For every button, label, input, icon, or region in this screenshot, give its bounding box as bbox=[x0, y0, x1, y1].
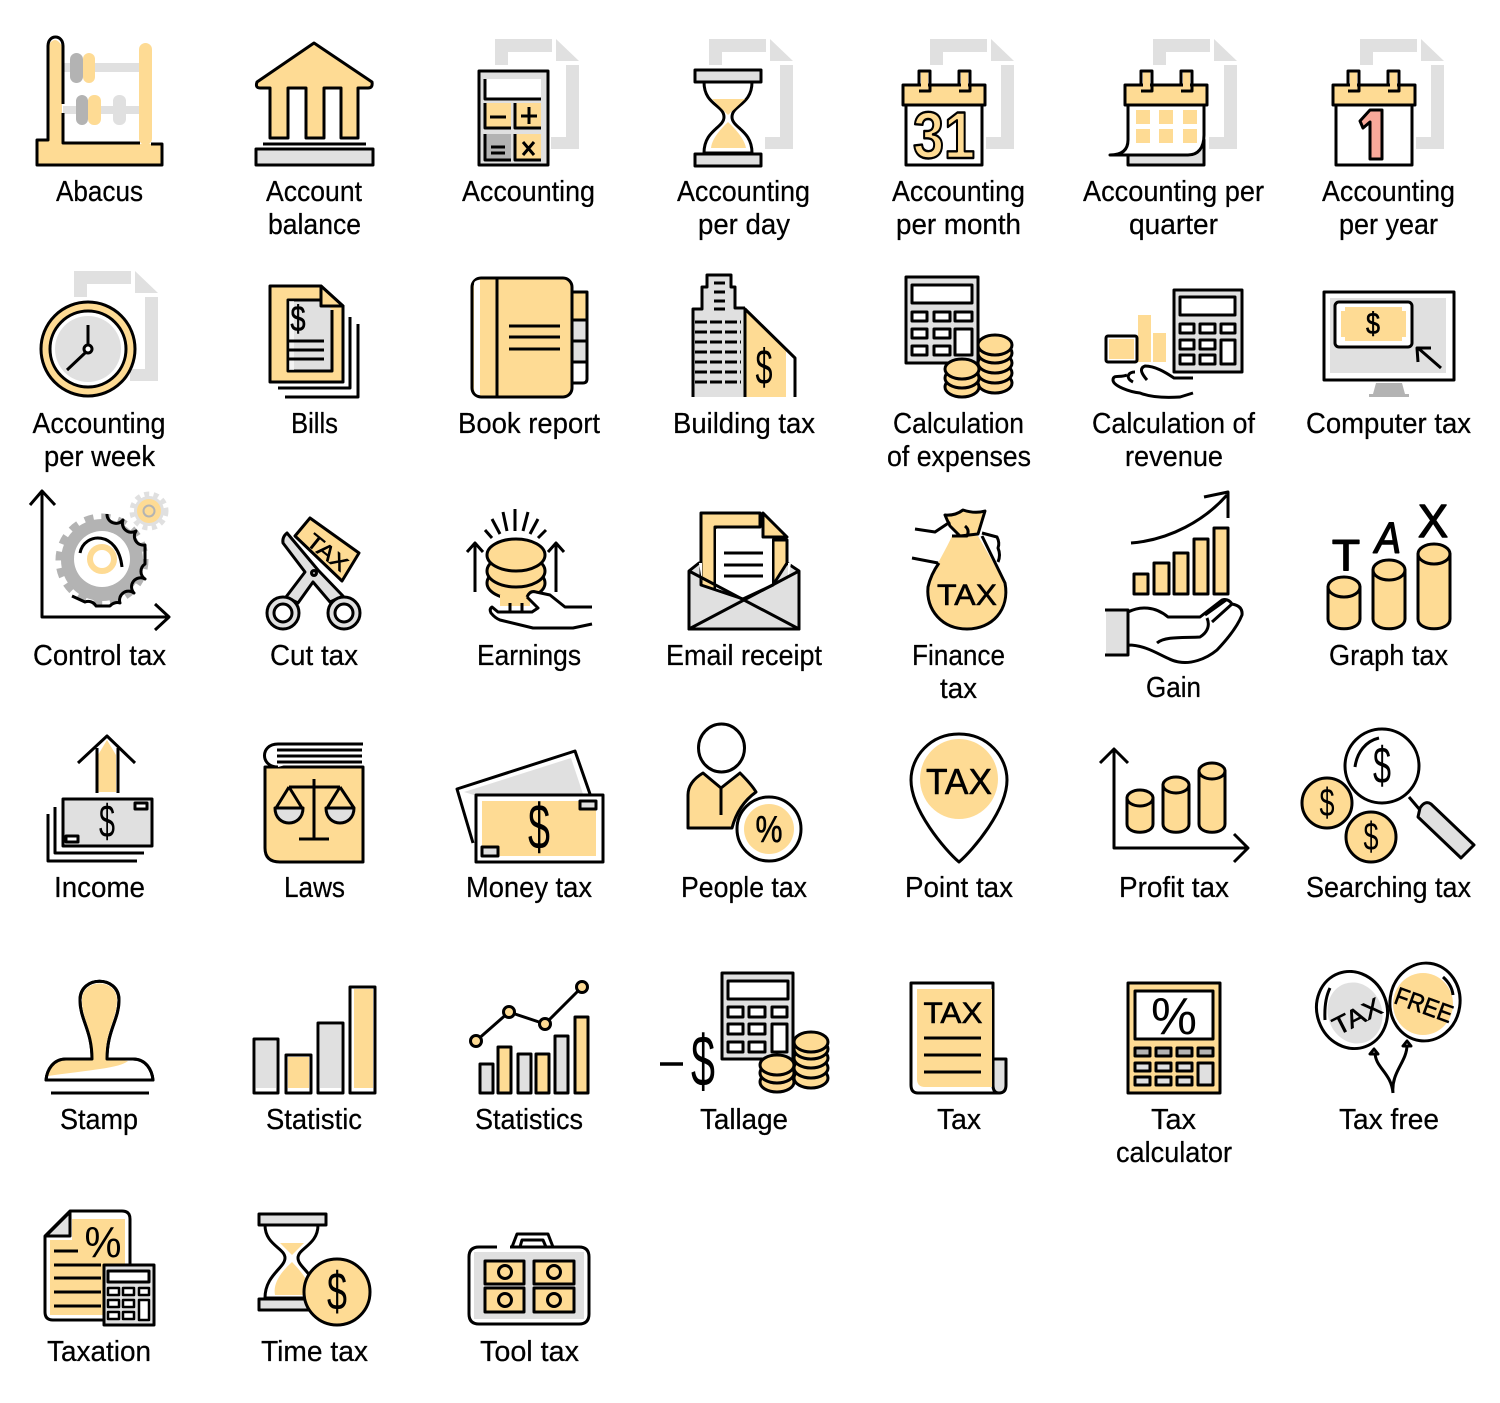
item: Laws bbox=[264, 744, 363, 904]
icon: money bag bbox=[912, 510, 1006, 629]
item: Earnings bbox=[467, 509, 592, 672]
icon: chart with cylinders bbox=[1100, 749, 1248, 862]
label: Accounting per month: per month bbox=[896, 209, 1021, 241]
icon: person with percent badge bbox=[688, 724, 801, 861]
label: Money tax: Money tax bbox=[466, 872, 592, 904]
icon text: dollar sign: $ bbox=[327, 1262, 347, 1322]
label: Finance tax: Finance bbox=[912, 640, 1005, 672]
item: Money tax bbox=[457, 751, 603, 904]
item: Accounting bbox=[462, 39, 595, 208]
label: Account balance: Account bbox=[266, 176, 362, 208]
label: Calculation of revenue: Calculation of bbox=[1092, 408, 1256, 440]
icon: percent calculator bbox=[1128, 983, 1220, 1093]
item: Accounting per day bbox=[677, 39, 810, 241]
label: Gain: Gain bbox=[1146, 672, 1201, 704]
icon text: percent: % bbox=[1151, 988, 1197, 1046]
label: Accounting per month bbox=[892, 176, 1025, 241]
icon: calendar 31 bbox=[903, 39, 1014, 172]
icon: calendar 31: 31 bbox=[913, 98, 975, 172]
item: Time tax bbox=[259, 1214, 370, 1368]
icon text: T A X: T bbox=[1332, 531, 1360, 580]
label: Finance tax bbox=[912, 640, 1005, 705]
label: Account balance: balance bbox=[268, 209, 361, 241]
item: Email receipt bbox=[666, 513, 822, 672]
icon text: TAX: TAX bbox=[937, 579, 997, 612]
icon: money with up arrow bbox=[48, 736, 152, 861]
label: Profit tax: Profit tax bbox=[1119, 872, 1229, 904]
label: Calculation of expenses: of expenses bbox=[887, 441, 1031, 473]
label: Tax calculator: Tax bbox=[1151, 1104, 1196, 1136]
icon: bar chart bbox=[254, 987, 375, 1093]
label: Time tax: Time tax bbox=[261, 1336, 368, 1368]
label: Tax: Tax bbox=[937, 1104, 981, 1136]
icon text: magnifier dollar: $ bbox=[1373, 737, 1391, 795]
label: Accounting: Accounting bbox=[462, 176, 595, 208]
icon text: T A X bbox=[1332, 495, 1448, 580]
label: Calculation of expenses bbox=[887, 408, 1031, 473]
item: Accounting per week bbox=[32, 271, 166, 473]
icon: bars with line chart bbox=[470, 982, 588, 1093]
label: Computer tax: Computer tax bbox=[1306, 408, 1471, 440]
label: Accounting per day: Accounting bbox=[677, 176, 810, 208]
icon: cylinders with TAX letters bbox=[1328, 495, 1450, 629]
icon: envelope with document bbox=[689, 513, 799, 629]
icon text: dollar sign: $ bbox=[1366, 306, 1380, 341]
icon: coins and hand bbox=[467, 509, 592, 628]
icon text: second coin dollar: $ bbox=[1364, 815, 1378, 859]
label: Calculation of expenses: Calculation bbox=[893, 408, 1024, 440]
icon: bills bbox=[270, 286, 358, 397]
label: Taxation: Taxation bbox=[47, 1336, 151, 1368]
icon: hand with growth chart bbox=[1105, 492, 1242, 662]
icon text: FREE: FREE bbox=[1391, 982, 1457, 1029]
icon text: T A X: X bbox=[1418, 495, 1448, 547]
label: Statistic: Statistic bbox=[266, 1104, 362, 1136]
icon: book bbox=[472, 278, 587, 397]
item: Point tax bbox=[905, 734, 1013, 904]
item: Control tax bbox=[30, 491, 169, 672]
item: Tax calculator bbox=[1116, 983, 1232, 1169]
icon text: dollar sign: $ bbox=[99, 795, 115, 847]
item: Statistics bbox=[470, 982, 588, 1136]
icon: chart with gears bbox=[30, 491, 169, 630]
icon text: TAX: TAX bbox=[1328, 992, 1387, 1041]
icon text: TAX: TAX bbox=[926, 761, 992, 802]
label: Accounting per day bbox=[677, 176, 810, 241]
item: Calculation of revenue bbox=[1092, 290, 1256, 473]
icon: rubber stamp bbox=[46, 981, 153, 1093]
item: Taxation bbox=[45, 1211, 154, 1368]
label: Finance tax: tax bbox=[940, 673, 977, 705]
icon: tool case bbox=[468, 1234, 590, 1325]
label: Accounting per day: per day bbox=[698, 209, 790, 241]
label: Accounting per month: Accounting bbox=[892, 176, 1025, 208]
item: Tool tax bbox=[468, 1234, 590, 1368]
item: Building tax bbox=[673, 275, 815, 440]
label: People tax: People tax bbox=[681, 872, 807, 904]
icon: hourglass bbox=[695, 39, 793, 166]
item: Abacus bbox=[37, 37, 162, 208]
icon: scissors cutting tag bbox=[267, 518, 360, 629]
label: Calculation of revenue: revenue bbox=[1125, 441, 1223, 473]
label: Accounting per quarter bbox=[1083, 176, 1264, 241]
icon: accounting calculator bbox=[479, 39, 579, 165]
item: Gain bbox=[1105, 492, 1242, 704]
label: Book report: Book report bbox=[458, 408, 600, 440]
icon: hourglass and coin bbox=[259, 1214, 370, 1325]
item: Stamp bbox=[46, 981, 153, 1136]
icon text: TAX tag: TAX bbox=[302, 530, 352, 576]
item: Computer tax bbox=[1306, 292, 1471, 440]
icon text: percent: % bbox=[84, 1218, 122, 1267]
item: Cut tax bbox=[267, 518, 360, 672]
item: Profit tax bbox=[1100, 749, 1248, 904]
icon: calendar page curl bbox=[1110, 39, 1237, 165]
item: Book report bbox=[458, 278, 600, 440]
icon: tax document bbox=[911, 983, 1006, 1093]
label: Bills: Bills bbox=[291, 408, 338, 440]
label: Earnings: Earnings bbox=[477, 640, 581, 672]
icon: map pin bbox=[911, 734, 1007, 862]
icon: balloons bbox=[1306, 959, 1465, 1093]
icon text: dollar sign: $ bbox=[290, 298, 306, 339]
label: Accounting per week: Accounting bbox=[32, 408, 166, 440]
label: Cut tax: Cut tax bbox=[270, 640, 358, 672]
label: Accounting per year: Accounting bbox=[1322, 176, 1455, 208]
item: Finance tax bbox=[912, 510, 1006, 705]
icon: building and document bbox=[693, 275, 795, 397]
label: Laws: Laws bbox=[284, 872, 345, 904]
icon: clock bbox=[41, 271, 158, 396]
icon: account balance bbox=[256, 43, 373, 165]
item: People tax bbox=[681, 724, 807, 904]
label: Tax calculator: calculator bbox=[1116, 1137, 1232, 1169]
label: Statistics: Statistics bbox=[475, 1104, 583, 1136]
label: Building tax: Building tax bbox=[673, 408, 815, 440]
label: Control tax: Control tax bbox=[33, 640, 166, 672]
icon: calendar 1 bbox=[1333, 39, 1444, 165]
icon: law book with scales bbox=[264, 744, 363, 862]
item: Accounting per year bbox=[1322, 39, 1455, 241]
label: Searching tax: Searching tax bbox=[1306, 872, 1471, 904]
item: Accounting per month bbox=[892, 39, 1025, 241]
label: Account balance bbox=[266, 176, 362, 241]
icon text: dollar sign: $ bbox=[691, 1022, 715, 1102]
icon text: coin dollar: $ bbox=[1320, 781, 1334, 825]
label: Point tax: Point tax bbox=[905, 872, 1013, 904]
label: Accounting per year: per year bbox=[1339, 209, 1438, 241]
icon: calculator, bars and hand bbox=[1106, 290, 1242, 397]
label: Tallage: Tallage bbox=[700, 1104, 788, 1136]
icon: abacus bbox=[37, 37, 162, 165]
icon: banknotes bbox=[457, 751, 603, 863]
item: Tallage bbox=[660, 973, 828, 1136]
label: Stamp: Stamp bbox=[60, 1104, 138, 1136]
item: Calculation of expenses bbox=[887, 277, 1031, 473]
item: Graph tax bbox=[1328, 495, 1450, 672]
item: Tax free bbox=[1306, 959, 1465, 1136]
label: Accounting per quarter: Accounting per bbox=[1083, 176, 1264, 208]
item: Searching tax bbox=[1302, 729, 1474, 904]
icon: calculator and coins bbox=[906, 277, 1012, 397]
item: Bills bbox=[270, 286, 358, 440]
item: Tax bbox=[911, 983, 1006, 1136]
label: Graph tax: Graph tax bbox=[1329, 640, 1448, 672]
icon text: TAX: TAX bbox=[924, 997, 982, 1030]
icon text: dollar sign: $ bbox=[756, 339, 772, 395]
label: Abacus: Abacus bbox=[56, 176, 143, 208]
icon: computer bbox=[1324, 292, 1454, 397]
icon: magnifier and coins bbox=[1302, 729, 1474, 862]
label: Tool tax: Tool tax bbox=[480, 1336, 579, 1368]
label: Tax calculator bbox=[1116, 1104, 1232, 1169]
icon: tax paper with calculator bbox=[45, 1211, 154, 1325]
label: Accounting per week: per week bbox=[44, 441, 155, 473]
icon: calculator, minus dollar and coins bbox=[660, 973, 828, 1102]
item: Accounting per quarter bbox=[1083, 39, 1264, 241]
label: Accounting per year bbox=[1322, 176, 1455, 241]
label: Email receipt: Email receipt bbox=[666, 640, 822, 672]
item: Income bbox=[48, 736, 152, 904]
icon text: percent: % bbox=[756, 809, 782, 850]
label: Income: Income bbox=[54, 872, 145, 904]
label: Tax free: Tax free bbox=[1339, 1104, 1439, 1136]
label: Accounting per quarter: quarter bbox=[1129, 209, 1218, 241]
label: Accounting per week bbox=[32, 408, 166, 473]
item: Account balance bbox=[256, 43, 373, 241]
icon text: dollar sign: $ bbox=[528, 791, 550, 863]
label: Calculation of revenue bbox=[1092, 408, 1256, 473]
item: Statistic bbox=[254, 987, 375, 1136]
icon text: T A X: A bbox=[1372, 514, 1401, 563]
